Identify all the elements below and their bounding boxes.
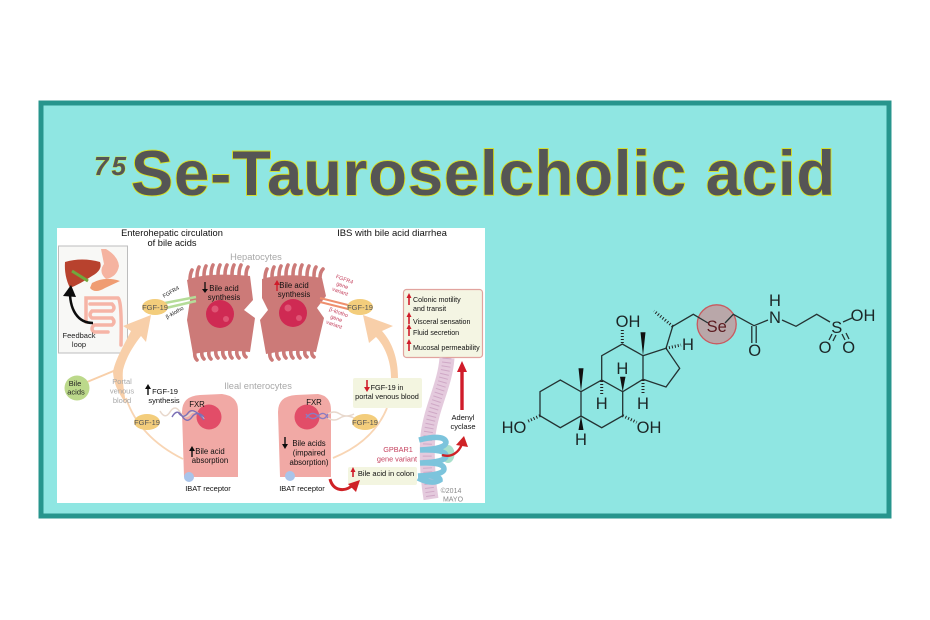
heading: enterohepatic circulation: Enterohepatic circulation xyxy=(121,228,223,238)
node: FGF-19 left lower: FGF-19 xyxy=(134,418,160,427)
chemical structure: tauroselcholic acid xyxy=(502,292,875,449)
arrow: red upward to effects xyxy=(457,361,467,410)
panel: left ileal enterocyte: FXR xyxy=(189,400,205,409)
callout: bile acid in colon xyxy=(348,467,417,485)
panel: feedback loop organs: Feedback xyxy=(63,331,95,340)
atom labels: O xyxy=(842,339,855,357)
panel: enterohepatic circulation diagram xyxy=(57,228,485,504)
panel: left ileal enterocyte: absorption xyxy=(192,456,228,465)
atom labels: Se xyxy=(707,318,727,336)
atom labels: OH xyxy=(637,419,661,437)
atom labels: OH xyxy=(616,313,640,331)
stereo hashes xyxy=(527,311,681,422)
label: FGF-19 synthesis: FGF-19 xyxy=(152,387,178,396)
arrow: red adenyl cyclase output xyxy=(442,436,468,456)
panel: right ileal enterocyte: Bile acids xyxy=(292,439,326,448)
atom labels: H xyxy=(637,395,649,413)
atom labels xyxy=(502,292,875,449)
label: portal venous blood: blood xyxy=(113,396,131,405)
panel: right ileal enterocyte: absorption) xyxy=(289,458,329,467)
receptor: left FGFR4 and beta-klotho: β-klotho xyxy=(165,306,185,321)
arrow: right portal circulation xyxy=(333,315,398,458)
node: FGF-19 right lower: FGF-19 xyxy=(352,418,378,427)
receptor: right FGFR4 and beta-klotho variants: gene xyxy=(329,314,343,324)
colon wall xyxy=(427,358,447,499)
receptor: left FGFR4 and beta-klotho xyxy=(162,286,196,321)
panel: right hepatocyte xyxy=(260,265,326,360)
callout: bile acid in colon: Bile acid in colon xyxy=(358,469,414,478)
panel: left hepatocyte: Bile acid xyxy=(209,284,239,293)
skeleton bonds xyxy=(540,314,852,428)
callout: colonic effects: Visceral sensation xyxy=(413,318,470,326)
receptor: right FGFR4 and beta-klotho variants: variant xyxy=(331,287,349,298)
callout: colonic effects xyxy=(404,290,482,358)
atom labels: H xyxy=(575,431,587,449)
receptor: right FGFR4 and beta-klotho variants: variant xyxy=(325,320,343,331)
atom labels: O xyxy=(748,342,761,360)
bile acids node: acids xyxy=(67,388,85,396)
atom labels: H xyxy=(616,360,628,378)
bile acids node: Bile xyxy=(69,379,81,388)
panel: right ileal enterocyte: FXR xyxy=(306,398,322,407)
label: portal venous blood: venous xyxy=(110,386,134,396)
node: FGF-19 right upper xyxy=(347,299,373,315)
atom labels: H xyxy=(596,395,608,413)
label: copyright: ©2014 xyxy=(441,488,461,495)
label: ileal enterocytes: Ileal enterocytes xyxy=(224,381,292,391)
title: isotope superscript: 75 xyxy=(94,151,129,181)
stereo wedges xyxy=(578,332,646,430)
label: IBAT receptor right: IBAT receptor xyxy=(279,484,325,493)
panel: teal framed background xyxy=(41,103,889,516)
receptor: left FGFR4 and beta-klotho: FGFR4 xyxy=(162,286,181,300)
node: FGF-19 right lower xyxy=(352,414,378,430)
panel: feedback loop organs: loop xyxy=(72,340,86,349)
panel: right ileal enterocyte: (impaired xyxy=(293,448,325,458)
label: hepatocytes: Hepatocytes xyxy=(230,252,282,262)
label: GPBAR1 gene variant: GPBAR1 xyxy=(383,445,413,454)
receptor: GPBAR1 coil xyxy=(418,437,454,482)
atom labels: OH xyxy=(851,307,875,325)
heading: IBS with bile acid diarrhea: IBS with bile acid diarrhea xyxy=(337,228,448,239)
atom labels: O xyxy=(819,339,832,357)
title xyxy=(94,139,835,209)
callout: colonic effects: Mucosal permeability xyxy=(413,344,480,352)
node: FGF-19 right upper: FGF-19 xyxy=(347,303,373,312)
panel: left ileal enterocyte xyxy=(160,394,238,482)
panel: right ileal enterocyte xyxy=(278,394,354,481)
panel: left ileal enterocyte: Bile acid xyxy=(195,447,225,456)
label: adenyl cyclase: Adenyl xyxy=(452,413,474,422)
atom labels: HO xyxy=(502,419,527,437)
atom labels: H xyxy=(769,292,781,310)
title: compound name: Se-Tauroselcholic acid xyxy=(131,139,835,209)
bile acids node xyxy=(64,370,116,400)
receptor: right FGFR4 and beta-klotho variants xyxy=(320,274,354,331)
node: FGF-19 left upper xyxy=(142,299,168,315)
callout: FGF-19 in portal venous blood xyxy=(353,378,422,408)
label: FGF-19 synthesis xyxy=(145,384,180,405)
panel: left hepatocyte: synthesis xyxy=(208,293,240,302)
receptor: right FGFR4 and beta-klotho variants: gene xyxy=(335,281,349,291)
atom labels: S xyxy=(831,319,842,337)
receptor: right FGFR4 and beta-klotho variants: β-klotho xyxy=(328,307,349,319)
heading: enterohepatic circulation: of bile acids xyxy=(147,238,197,248)
atom labels: H xyxy=(682,336,694,354)
arrow: left portal circulation xyxy=(113,315,183,459)
atom labels: N xyxy=(769,309,781,327)
callout: colonic effects: Colonic motility xyxy=(413,296,461,304)
label: IBAT receptor left: IBAT receptor xyxy=(185,484,231,493)
callout: FGF-19 in portal venous blood: portal venous blood xyxy=(355,392,419,401)
label: adenyl cyclase: cyclase xyxy=(450,422,476,431)
panel: left hepatocyte xyxy=(187,265,255,360)
panel: right hepatocyte: Bile acid xyxy=(279,281,309,290)
label: GPBAR1 gene variant: gene variant xyxy=(377,454,417,464)
arrow: red curved to colon xyxy=(330,479,360,492)
callout: FGF-19 in portal venous blood: FGF-19 in xyxy=(371,383,403,392)
callout: colonic effects: and transit xyxy=(413,305,446,313)
receptor: right FGFR4 and beta-klotho variants: FGFR4 xyxy=(335,274,354,286)
panel: feedback loop organs xyxy=(58,246,128,353)
node: FGF-19 left upper: FGF-19 xyxy=(142,303,168,312)
selenium highlight xyxy=(697,305,736,344)
label: FGF-19 synthesis: synthesis xyxy=(148,396,180,405)
label: copyright: MAYO xyxy=(443,496,464,504)
callout: colonic effects: Fluid secretion xyxy=(413,329,459,337)
panel: right hepatocyte: synthesis xyxy=(278,290,310,299)
node: FGF-19 left lower xyxy=(134,414,160,430)
label: portal venous blood: Portal xyxy=(112,377,132,386)
